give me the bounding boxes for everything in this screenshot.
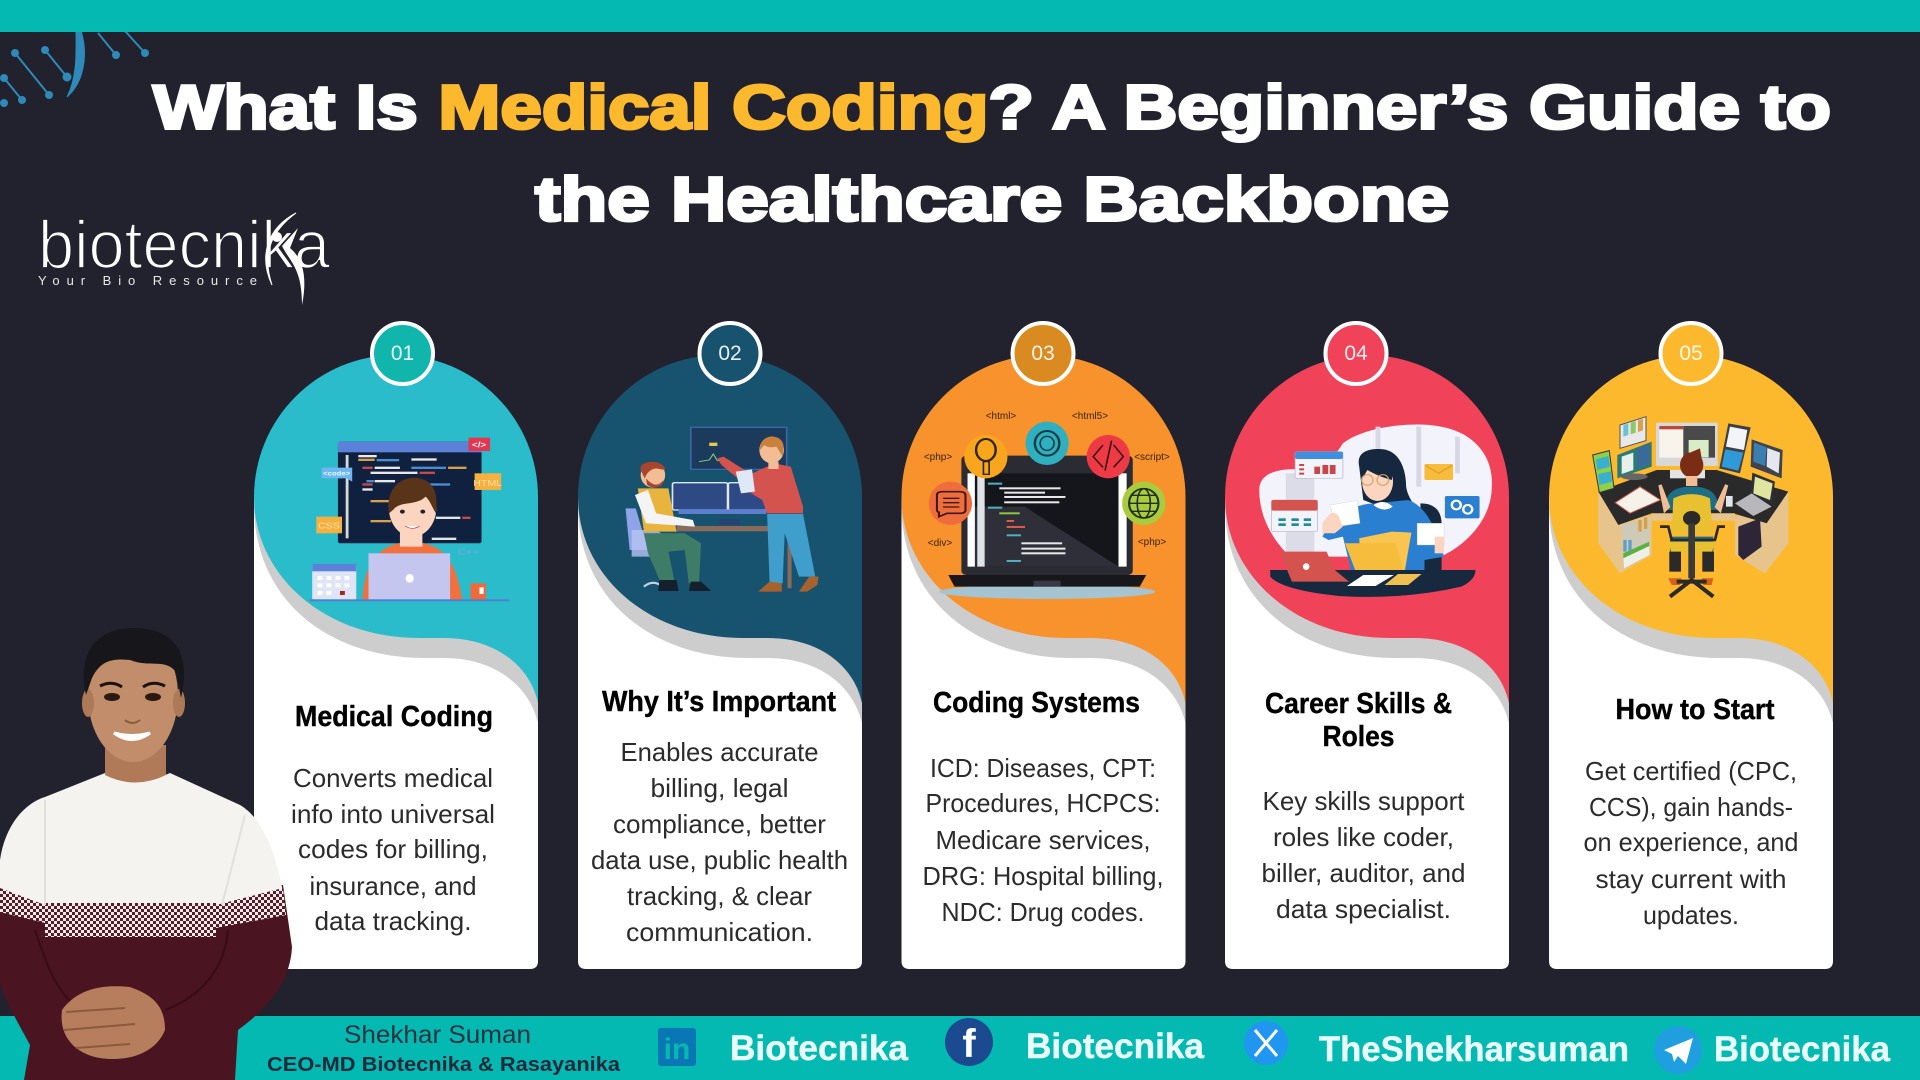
text block: NDC: Drug codes. (942, 897, 1144, 927)
social: LinkedIn: in (664, 1033, 690, 1066)
illustration: coder with laptop (309, 438, 509, 601)
panel: card 1 Medical Coding (254, 323, 538, 969)
logo: biotecnika: Your Bio Resource (38, 273, 257, 288)
text block (1584, 756, 1798, 930)
illustration: workstation with monitors (1593, 417, 1788, 597)
heading: Career Skills & (1265, 688, 1452, 720)
social: LinkedIn: Biotecnika (730, 1029, 909, 1068)
text block: CCS), gain hands- (1589, 792, 1793, 822)
text block: billing, legal (650, 773, 788, 803)
text block: communication. (626, 917, 813, 947)
text block: ICD: Diseases, CPT: (930, 753, 1156, 783)
social: X (1244, 1021, 1629, 1069)
heading: Medical Coding (295, 701, 493, 733)
panel: card 2 Why It's Important (578, 323, 862, 969)
text block: biller, auditor, and (1262, 858, 1466, 888)
number badge 02 (700, 323, 760, 384)
text block: DRG: Hospital billing, (922, 861, 1164, 891)
text block: data tracking. (314, 906, 472, 936)
number badge 05: 05 (1679, 342, 1703, 365)
footer teal bar (0, 1016, 1920, 1080)
text block: Converts medical (293, 763, 493, 793)
code tag labels: <script> (1134, 452, 1170, 463)
text block: Procedures, HCPCS: (926, 788, 1160, 818)
text block: stay current with (1596, 864, 1786, 894)
presenter name and role: CEO-MD Biotecnika & Rasayanika (267, 1054, 621, 1076)
illustration: coder with laptop: </> (472, 440, 486, 449)
text block: data specialist. (1276, 894, 1451, 924)
text block: updates. (1643, 900, 1739, 930)
social: Facebook: f (962, 1022, 976, 1066)
panel: card 4 Career Skills & Roles (1225, 323, 1509, 969)
code tag labels: <html> (986, 411, 1016, 422)
number badge 01 (372, 323, 433, 384)
illustration: laptop with code icons (929, 422, 1165, 599)
number badge 03 (1012, 323, 1074, 384)
title: the Healthcare Backbone (535, 166, 1449, 234)
code tag labels: <html5> (1072, 411, 1108, 422)
social: LinkedIn (658, 1028, 909, 1068)
panel: card 3 Coding Systems (902, 323, 1186, 969)
heading: How to Start (1616, 694, 1775, 726)
text block: Enables accurate (620, 737, 818, 767)
top teal bar (0, 0, 1920, 32)
logo: biotecnika: biotecnika (38, 207, 330, 283)
illustration: coder with laptop: C++ (458, 548, 479, 558)
text block: data use, public health (591, 845, 848, 875)
text block (1262, 786, 1466, 924)
code tag labels: <php> (924, 452, 952, 463)
text block (591, 737, 848, 947)
code tag labels (924, 411, 1170, 549)
text block: compliance, better (613, 809, 826, 839)
number badge 03: 03 (1031, 342, 1055, 365)
title: What Is Medical Coding ? A Beginner’s Guide to (153, 74, 1831, 142)
presenter portrait (0, 628, 292, 1080)
text block (922, 753, 1164, 927)
text block: on experience, and (1584, 827, 1798, 857)
code tag labels: <php> (1138, 537, 1166, 548)
illustration: coder with laptop: CSS (318, 521, 340, 531)
text block: roles like coder, (1273, 822, 1454, 852)
social: Telegram (1654, 1026, 1891, 1074)
panel: card 5 How to Start (1549, 323, 1833, 969)
illustration: coder with laptop: HTML (473, 479, 503, 489)
text block: tracking, & clear (627, 881, 812, 911)
text block: insurance, and (310, 871, 476, 901)
number badge 02: 02 (718, 342, 742, 365)
number badge 01: 01 (391, 342, 414, 365)
text block: Get certified (CPC, (1585, 756, 1797, 786)
illustration: two colleagues at monitors (626, 427, 819, 592)
text block: Key skills support (1262, 786, 1465, 816)
text block: info into universal (291, 799, 495, 829)
text block: Medicare services, (936, 825, 1150, 855)
heading: Roles (1322, 721, 1394, 753)
social: Facebook: Biotecnika (1026, 1027, 1205, 1066)
illustration: woman with documents at desk (1259, 425, 1492, 597)
social: Facebook (945, 1018, 1205, 1066)
heading: Why It’s Important (602, 686, 836, 718)
number badge 04: 04 (1344, 342, 1368, 365)
heading: Coding Systems (933, 687, 1140, 719)
number badge 05 (1660, 323, 1722, 384)
social: Telegram: Biotecnika (1714, 1030, 1891, 1069)
presenter name and role (267, 1021, 621, 1076)
decoration: DNA strand (1, 28, 148, 106)
illustration: coder with laptop: <code> (323, 471, 350, 477)
title (153, 74, 1831, 234)
text block: codes for billing, (298, 834, 488, 864)
presenter name and role: Shekhar Suman (344, 1021, 531, 1049)
text block (291, 763, 495, 936)
heading (1265, 688, 1452, 753)
number badge 04 (1326, 323, 1386, 384)
social: X: TheShekharsuman (1319, 1030, 1629, 1069)
code tag labels: <div> (928, 538, 952, 549)
